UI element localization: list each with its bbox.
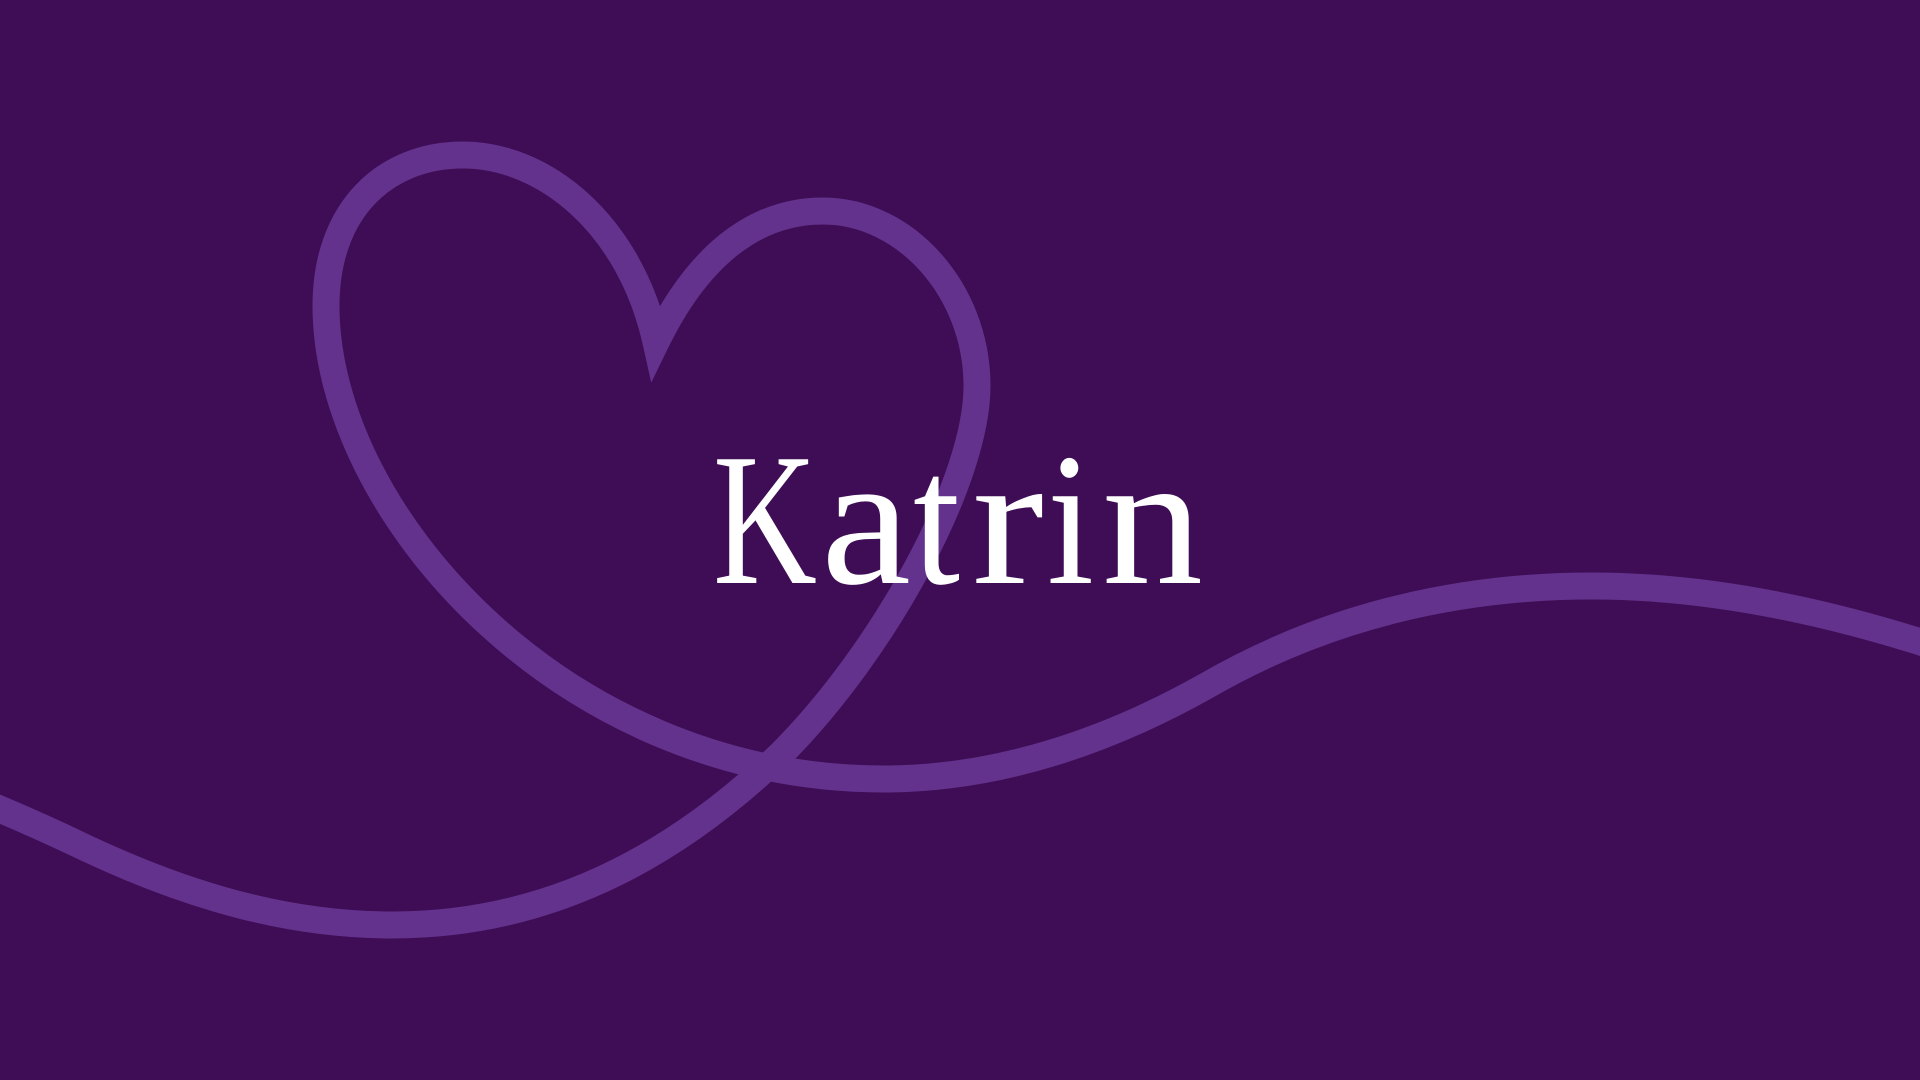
name text bbox=[713, 415, 1203, 624]
name text: i bbox=[1047, 415, 1094, 624]
heart line flourish bbox=[0, 155, 1920, 925]
name text: n bbox=[1102, 415, 1203, 624]
name text: K bbox=[713, 415, 817, 624]
name text: r bbox=[972, 415, 1044, 624]
name text: t bbox=[913, 415, 960, 624]
name text: a bbox=[821, 415, 911, 624]
